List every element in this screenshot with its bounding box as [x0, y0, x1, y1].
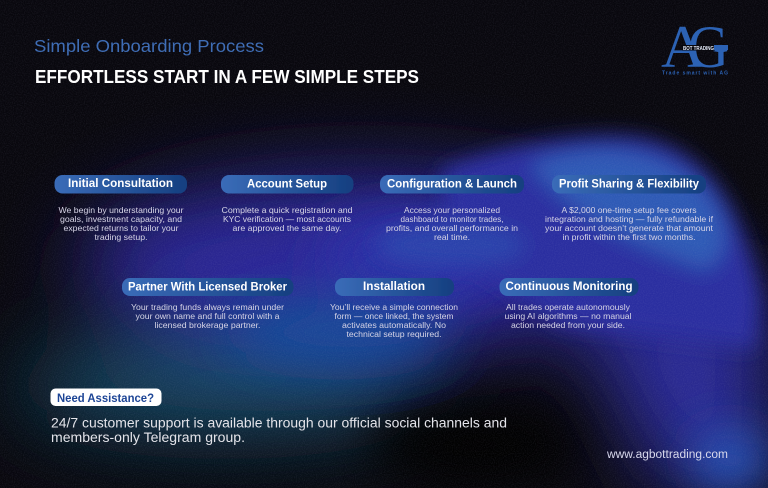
step: initial consultation: Initial Consultation — [68, 176, 173, 190]
step: partner with licensed broker: Partner With Licensed Broker — [128, 279, 287, 293]
header — [34, 36, 419, 87]
step: configuration and launch: Access your personalized — [404, 205, 500, 215]
step: continuous monitoring — [500, 278, 638, 330]
step: initial consultation: goals, investment capacity, and — [60, 214, 182, 224]
step: configuration and launch — [380, 175, 524, 242]
step: profit sharing and flexibility: in profit within the first two months. — [562, 232, 696, 242]
step: continuous monitoring: All trades operate autonomously — [506, 302, 631, 312]
support section — [50, 388, 507, 445]
step: profit sharing and flexibility: A $2,000 one-time setup fee covers — [562, 205, 696, 215]
logo: BOT TRADING — [683, 46, 714, 52]
step: installation: Installation — [363, 279, 425, 293]
logo: A — [661, 14, 705, 80]
need assistance badge — [50, 388, 162, 406]
step: initial consultation: expected returns to tailor your — [64, 223, 179, 233]
step: configuration and launch: profits, and overall performance in — [386, 223, 518, 233]
step: account setup — [221, 175, 354, 233]
need assistance badge: Need Assistance? — [57, 393, 154, 405]
step: profit sharing and flexibility: integration and hosting — fully refundable if — [545, 214, 714, 224]
step: profit sharing and flexibility: your account doesn’t generate that amount — [545, 223, 714, 233]
support text: 24/7 customer support is available through our official social channels and — [51, 416, 507, 430]
step: profit sharing and flexibility — [545, 175, 714, 242]
logo — [661, 14, 729, 80]
step: account setup: are approved the same day. — [232, 223, 342, 233]
step: initial consultation: We begin by understanding your — [58, 205, 184, 215]
step: installation — [330, 278, 458, 339]
step: partner with licensed broker: your own name and full control with a — [136, 311, 280, 321]
step: continuous monitoring: using AI algorithms — no manual — [504, 311, 632, 321]
step: continuous monitoring: Continuous Monitoring — [506, 279, 632, 293]
logo: G — [688, 14, 729, 80]
step: installation: activates automatically. No — [342, 320, 446, 330]
step: account setup: Complete a quick registration and — [222, 205, 353, 215]
step: initial consultation: trading setup. — [94, 232, 148, 242]
step: configuration and launch: dashboard to monitor trades, — [400, 214, 504, 224]
step: partner with licensed broker — [122, 278, 294, 330]
step: account setup: KYC verification — most accounts — [223, 214, 351, 224]
support text: members-only Telegram group. — [51, 430, 245, 445]
step: profit sharing and flexibility: Profit Sharing & Flexibility — [559, 176, 699, 190]
logo: Trade smart with AG — [662, 70, 728, 76]
title: EFFORTLESS START IN A FEW SIMPLE STEPS — [35, 67, 419, 87]
step: partner with licensed broker: Your trading funds always remain under — [131, 302, 284, 312]
step: installation: You’ll receive a simple connection — [330, 302, 458, 312]
step: installation: technical setup required. — [346, 329, 442, 339]
step: partner with licensed broker: licensed brokerage partner. — [154, 320, 260, 330]
subtitle: Simple Onboarding Process — [34, 36, 264, 56]
step: installation: form — once linked, the system — [334, 311, 454, 321]
step: initial consultation — [54, 175, 187, 242]
step: continuous monitoring: action needed from your side. — [511, 320, 625, 330]
step: account setup: Account Setup — [247, 176, 327, 190]
website url: www.agbottrading.com — [606, 449, 728, 461]
support text — [51, 416, 507, 445]
step: configuration and launch: Configuration & Launch — [387, 176, 517, 190]
step: configuration and launch: real time. — [434, 232, 470, 242]
